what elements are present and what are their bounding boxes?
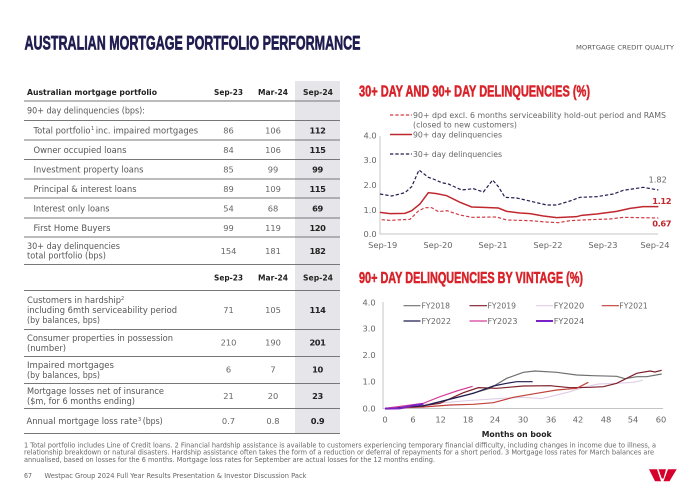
y axis labels: 2.0 <box>364 180 377 190</box>
row: impaired mortgages: 10 <box>312 365 323 375</box>
row: annual mortgage loss rate: (bps) <box>143 417 163 427</box>
row: first home buyers: First Home Buyers <box>34 224 111 234</box>
x axis labels: 6 <box>410 414 416 424</box>
footer: 67 <box>24 472 32 480</box>
y axis labels: 4.0 <box>364 130 377 140</box>
legend: 90+ dpd excl. 6 months serviceability hold-out period and RAMS <box>413 110 666 120</box>
row: first home buyers <box>34 223 326 234</box>
table header: Australian mortgage portfolio <box>27 87 157 97</box>
x axis labels: Sep-24 <box>640 240 670 250</box>
row: mortgage losses: 20 <box>268 391 278 401</box>
table header: Sep-23 <box>214 87 243 97</box>
legend: (closed to new customers) <box>413 120 517 130</box>
chart axes <box>380 136 658 234</box>
y axis labels <box>362 297 376 414</box>
row: total portfolio: 86 <box>223 126 234 136</box>
y axis labels: 0.0 <box>364 229 377 239</box>
legend: FY2024 <box>554 316 584 326</box>
row: principal and interest <box>34 184 326 195</box>
row: investment property: Investment property loans <box>34 166 144 176</box>
x axis labels: 24 <box>490 414 500 424</box>
row: impaired mortgages: 6 <box>226 365 231 375</box>
row: customers in hardship: Customers in hardship <box>27 296 121 306</box>
row: consumer properties in possession: 201 <box>309 338 326 348</box>
icon: Westpac logo <box>649 469 677 481</box>
row: total portfolio: 106 <box>265 126 281 136</box>
end values: 1.82 <box>648 174 667 184</box>
row: total portfolio: 112 <box>309 126 326 136</box>
legend: 90+ day delinquencies <box>413 130 502 140</box>
legend: FY2019 <box>488 301 516 311</box>
row: mortgage losses: ($m, for 6 months ending) <box>27 397 135 407</box>
row: mortgage losses: 21 <box>223 391 234 401</box>
legend: FY2021 <box>619 301 648 311</box>
section label: MORTGAGE CREDIT QUALITY <box>576 44 674 52</box>
end values: 0.67 <box>652 218 672 228</box>
footnotes: 1 Total portfolio includes Line of Credit loans. 2 Financial hardship assistance is available to customers experiencing temporary financial difficulty, including changes in income due to illness, a <box>24 441 656 449</box>
row: investment property: 99 <box>268 164 278 174</box>
row: owner occupied <box>34 145 326 156</box>
series lines <box>385 370 662 409</box>
row: principal and interest: 89 <box>223 184 234 194</box>
x axis labels: 30 <box>518 414 528 424</box>
row: consumer properties in possession: (number) <box>27 344 66 354</box>
row: principal and interest: 115 <box>309 184 326 194</box>
y axis labels <box>364 130 377 239</box>
second table header: Mar-24 <box>258 272 288 282</box>
row: owner occupied: 84 <box>223 145 234 155</box>
row: customers in hardship: including 6mth serviceability period <box>27 306 177 316</box>
table header <box>27 87 333 97</box>
row: annual mortgage loss rate: Annual mortgage loss rate <box>26 417 138 427</box>
legend: FY2018 <box>422 301 450 311</box>
line chart: delinquencies by vintage <box>362 297 666 439</box>
legend <box>390 110 666 159</box>
x axis labels: Sep-23 <box>588 240 618 250</box>
row: impaired mortgages: Impaired mortgages <box>27 361 115 371</box>
row: mortgage losses: Mortgage losses net of insurance <box>27 387 164 397</box>
row: principal and interest: 109 <box>265 184 281 194</box>
panel: mortgage portfolio table <box>24 81 340 434</box>
row: total portfolio: Total portfolio <box>33 126 90 136</box>
axis title: Months on book <box>482 429 552 439</box>
row: principal and interest: Principal & interest loans <box>34 185 137 195</box>
row: owner occupied: 106 <box>265 145 281 155</box>
x axis labels: 54 <box>628 414 638 424</box>
row: total portfolio <box>33 126 326 136</box>
row: total portfolio: inc. impaired mortgages <box>96 126 199 136</box>
row: 30+ day delinquencies: 182 <box>309 246 326 256</box>
x axis labels: Sep-19 <box>368 240 397 250</box>
row: consumer properties in possession: 190 <box>265 338 281 348</box>
row: mortgage losses: 23 <box>312 391 323 401</box>
row: investment property <box>34 164 323 176</box>
x axis labels: 42 <box>573 414 583 424</box>
footnotes <box>24 441 656 464</box>
footer: Westpac Group 2024 Full Year Results Presentation & Investor Discussion Pack <box>44 472 307 480</box>
x axis labels: 18 <box>463 414 473 424</box>
y axis labels: 2.0 <box>362 350 376 360</box>
second table header <box>214 272 333 282</box>
row: 30+ day delinquencies: 30+ day delinquencies <box>27 242 121 252</box>
x axis labels <box>382 414 666 424</box>
second table header: Sep-23 <box>214 272 243 282</box>
row: first home buyers: 119 <box>265 223 281 233</box>
row: 90+ day delinquencies heading: 90+ day delinquencies (bps): <box>27 106 145 116</box>
row: 30+ day delinquencies <box>27 242 326 262</box>
row: 30+ day delinquencies: 154 <box>221 246 236 256</box>
row: customers in hardship: 71 <box>223 305 234 315</box>
heading: delinquencies chart: 30+ DAY AND 90+ DAY DELINQUENCIES (%) <box>359 84 590 100</box>
row: first home buyers: 99 <box>223 223 234 233</box>
second table header: Sep-24 <box>303 272 333 282</box>
footnotes: annualised, based on losses for the 6 months. Mortgage loss rates for September are actual losses for the 12 months ending. <box>24 456 435 464</box>
x axis labels: Sep-20 <box>423 240 453 250</box>
y axis labels: 3.0 <box>364 155 377 165</box>
row: consumer properties in possession: Consumer properties in possession <box>27 334 173 344</box>
legend: FY2022 <box>422 316 451 326</box>
row: 30+ day delinquencies: total portfolio (bps) <box>27 252 106 262</box>
row: interest only: 68 <box>268 204 278 214</box>
x axis labels: 48 <box>601 414 611 424</box>
x axis labels: 36 <box>546 414 556 424</box>
row: annual mortgage loss rate: 3 <box>138 417 141 423</box>
x axis labels: 0 <box>382 414 388 424</box>
heading: vintage chart: 90+ DAY DELINQUENCIES BY VINTAGE (%) <box>359 270 583 287</box>
x axis labels: 60 <box>656 414 666 424</box>
y axis labels: 3.0 <box>362 324 376 334</box>
row: first home buyers: 120 <box>309 223 326 233</box>
legend: FY2023 <box>488 316 518 326</box>
row: annual mortgage loss rate: 0.9 <box>311 416 325 426</box>
row: customers in hardship: 2 <box>121 296 124 302</box>
series lines <box>380 170 658 223</box>
end values: 1.12 <box>652 196 672 206</box>
footnotes: relationship breakdown or natural disasters. Hardship assistance often takes the form of a reduction or deferral of repayments for a short period. 3 Mortgage loss rates for March balances are <box>24 448 654 456</box>
title: AUSTRALIAN MORTGAGE PORTFOLIO PERFORMANCE <box>24 32 360 54</box>
row: owner occupied: Owner occupied loans <box>34 146 127 156</box>
y axis labels: 0.0 <box>362 404 376 414</box>
table header: Sep-24 <box>303 87 333 97</box>
row: 30+ day delinquencies: 181 <box>265 246 281 256</box>
y axis labels: 1.0 <box>362 377 376 387</box>
row: investment property: 99 <box>312 164 323 174</box>
row: interest only: 69 <box>312 204 323 214</box>
row: interest only: 54 <box>223 204 234 214</box>
row: annual mortgage loss rate <box>26 416 325 427</box>
row: annual mortgage loss rate: 0.7 <box>222 416 235 426</box>
legend: FY2020 <box>554 301 584 311</box>
row: customers in hardship <box>27 296 326 326</box>
y axis labels: 1.0 <box>364 205 377 215</box>
row: impaired mortgages: (by balances, bps) <box>27 371 100 381</box>
x axis labels <box>368 240 670 250</box>
row: customers in hardship: 105 <box>265 305 281 315</box>
row: investment property: 85 <box>223 164 234 174</box>
legend: 30+ day delinquencies <box>413 149 502 159</box>
x axis labels: Sep-21 <box>478 240 508 250</box>
line chart: 30+ and 90+ day delinquencies <box>364 110 672 250</box>
chart axes <box>383 302 663 408</box>
y axis labels: 4.0 <box>362 297 376 307</box>
row: annual mortgage loss rate: 0.8 <box>266 416 280 426</box>
table header: Mar-24 <box>258 87 288 97</box>
end values <box>648 174 672 228</box>
row: consumer properties in possession <box>27 334 326 354</box>
legend <box>404 301 648 326</box>
row: mortgage losses <box>27 387 323 407</box>
row: owner occupied: 115 <box>309 145 326 155</box>
row: total portfolio: 1 <box>91 126 94 132</box>
row: interest only: Interest only loans <box>34 204 110 214</box>
row: impaired mortgages: 7 <box>270 365 276 375</box>
x axis labels: 12 <box>435 414 446 424</box>
row: consumer properties in possession: 210 <box>221 338 236 348</box>
row: customers in hardship: 114 <box>309 305 326 315</box>
x axis labels: Sep-22 <box>533 240 563 250</box>
row: impaired mortgages <box>27 361 323 381</box>
row: customers in hardship: (by balances, bps) <box>27 316 100 326</box>
row: interest only <box>34 204 323 214</box>
